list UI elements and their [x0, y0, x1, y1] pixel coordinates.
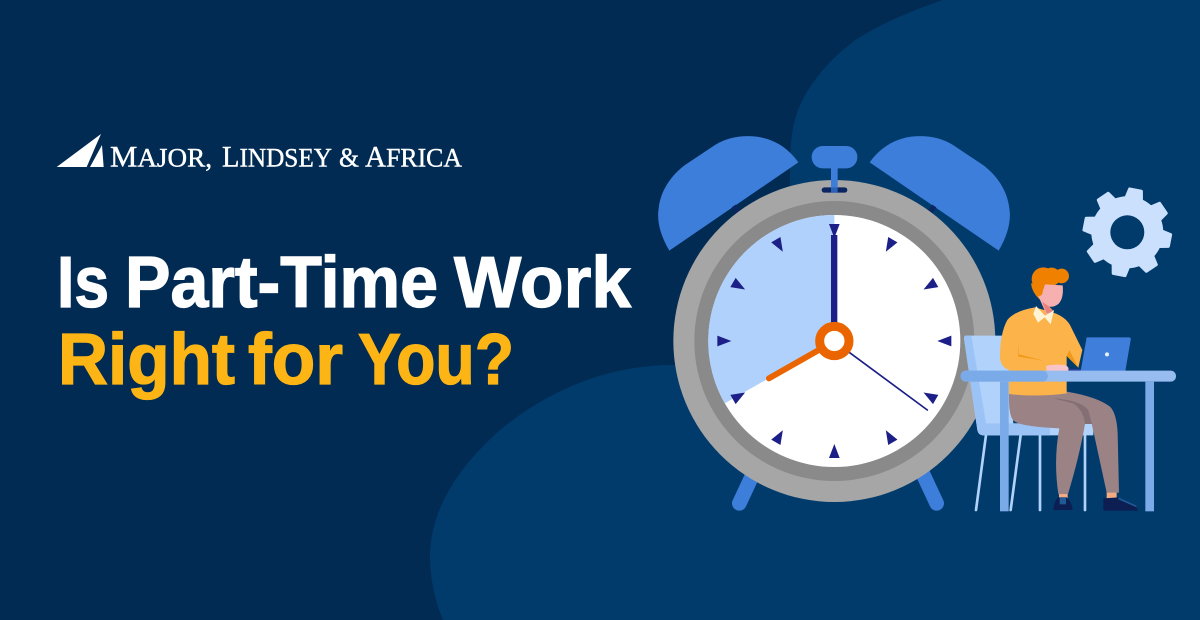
- gear icon: [1084, 189, 1171, 276]
- clock hands: [769, 235, 927, 410]
- title: You?: [358, 320, 514, 400]
- logo wordmark: LINDSEY: [222, 140, 332, 174]
- logo wordmark: AFRICA: [365, 140, 462, 174]
- clock body: [673, 180, 995, 502]
- title: Part-Time: [125, 243, 438, 323]
- logo wordmark: [110, 140, 462, 174]
- desk: [960, 371, 1176, 511]
- clock top button: [812, 146, 857, 192]
- hair: [1031, 267, 1069, 299]
- clock bells: [658, 136, 1010, 251]
- title: Is: [57, 243, 109, 323]
- alarm clock: [658, 136, 1010, 503]
- clock tick marks: [717, 224, 951, 458]
- title: Right: [58, 320, 235, 400]
- logo: [57, 134, 462, 174]
- logo wordmark: &: [339, 142, 359, 172]
- title: [57, 243, 632, 400]
- clock feet: [739, 473, 937, 503]
- title: Work: [454, 243, 632, 323]
- logo mark: [57, 134, 104, 167]
- laptop: [1068, 337, 1131, 371]
- logo wordmark: MAJOR,: [110, 140, 212, 174]
- chair: [964, 336, 1093, 510]
- person working at desk: [960, 267, 1176, 511]
- person: [1000, 267, 1138, 511]
- title: for: [248, 320, 343, 400]
